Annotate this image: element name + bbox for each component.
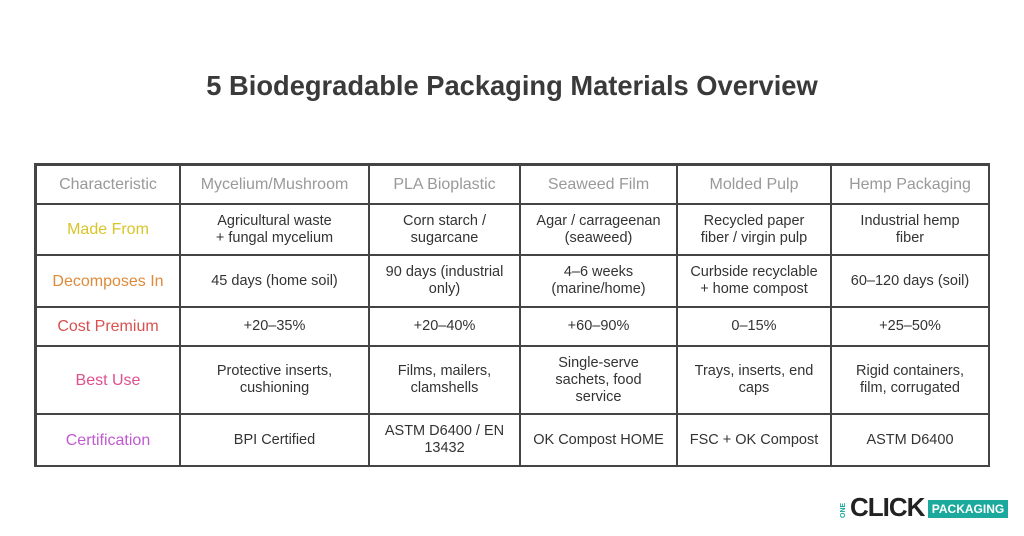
row: decomposes xyxy=(36,256,969,306)
row: cost xyxy=(36,308,941,345)
table: +20–40% xyxy=(414,318,475,334)
table: sachets, food xyxy=(555,372,642,388)
table: Decomposes In xyxy=(52,272,164,290)
table: only) xyxy=(429,281,460,297)
table: PLA Bioplastic xyxy=(393,176,496,193)
table: (seaweed) xyxy=(565,230,632,246)
table: +25–50% xyxy=(879,318,941,334)
table: service xyxy=(576,388,621,404)
table: sugarcane xyxy=(411,230,478,246)
table: Agricultural waste xyxy=(217,212,332,228)
title: 5 Biodegradable Packaging Materials Overview xyxy=(206,70,818,101)
table: Certification xyxy=(66,432,150,448)
table: Molded Pulp xyxy=(710,176,798,193)
table: BPI Certified xyxy=(234,432,315,448)
table xyxy=(34,163,990,467)
table: ASTM D6400 xyxy=(866,432,954,448)
table: + home compost xyxy=(700,281,808,297)
table: (marine/home) xyxy=(551,281,646,297)
table: OK Compost HOME xyxy=(533,432,664,448)
table: Mycelium/Mushroom xyxy=(201,176,348,193)
table: fiber / virgin pulp xyxy=(701,230,807,246)
table: Trays, inserts, end xyxy=(695,363,813,379)
logo: CLICK xyxy=(850,492,924,522)
table: Protective inserts, xyxy=(217,363,332,379)
table: Corn starch / xyxy=(403,212,486,228)
table: 60–120 days (soil) xyxy=(851,272,969,288)
table: Cost Premium xyxy=(57,318,159,335)
table: Best Use xyxy=(76,372,140,388)
row: certification xyxy=(36,415,954,465)
table: Made From xyxy=(67,221,149,238)
table: + fungal mycelium xyxy=(216,230,333,246)
logo: PACKAGING xyxy=(932,502,1004,516)
table: 0–15% xyxy=(731,318,777,334)
table: Agar / carrageenan xyxy=(536,212,661,228)
table: 90 days (industrial xyxy=(386,264,503,280)
row: best use xyxy=(36,347,964,413)
table: 4–6 weeks xyxy=(564,264,633,280)
table: caps xyxy=(739,380,769,396)
logo: ONE xyxy=(840,503,847,518)
table: clamshells xyxy=(411,380,478,396)
table: ASTM D6400 / EN xyxy=(385,423,504,439)
logo xyxy=(840,492,1008,522)
table: +20–35% xyxy=(244,318,305,334)
table: Hemp Packaging xyxy=(849,176,971,193)
table: Industrial hemp xyxy=(860,212,960,228)
table: fiber xyxy=(896,230,924,246)
table: Recycled paper xyxy=(704,212,804,228)
table: Characteristic xyxy=(59,176,157,193)
row: made from xyxy=(36,205,960,254)
table: 45 days (home soil) xyxy=(211,272,338,288)
table: +60–90% xyxy=(568,318,629,334)
table: Seaweed Film xyxy=(548,176,649,193)
table: Rigid containers, xyxy=(856,363,964,379)
header row xyxy=(36,165,988,203)
table: film, corrugated xyxy=(860,380,960,396)
table: Curbside recyclable xyxy=(690,264,818,280)
table: Single-serve xyxy=(558,354,639,370)
table: FSC + OK Compost xyxy=(690,432,818,448)
table: Films, mailers, xyxy=(398,363,491,379)
table: 13432 xyxy=(424,440,465,456)
table: cushioning xyxy=(240,380,309,396)
